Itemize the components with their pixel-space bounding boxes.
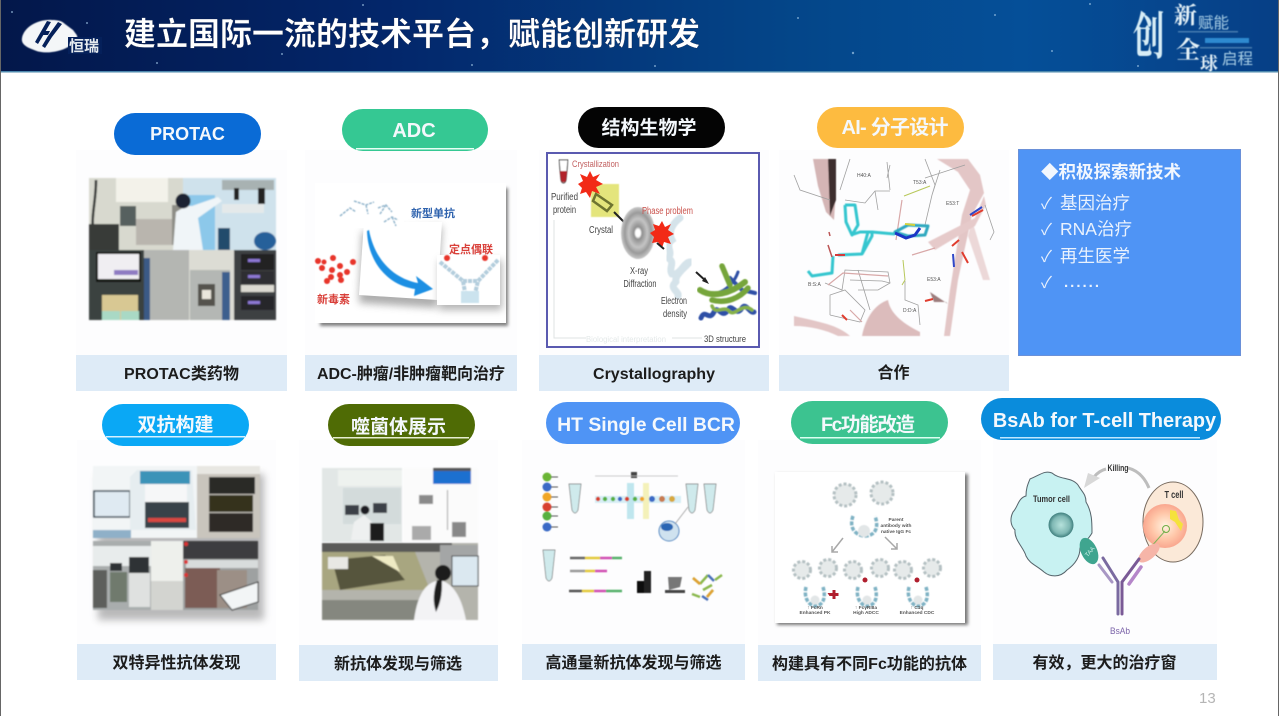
caption: phage display (299, 645, 498, 681)
pill: bispecific construct: 双抗构建 (137, 413, 214, 436)
diagram: BsAb mechanism: Tumor cell (1033, 494, 1070, 505)
diagram: BsAb mechanism: T cell (1164, 490, 1184, 501)
panel: structural biology (539, 150, 769, 391)
diagram: Fc variants: Enhanced CDC (900, 610, 935, 616)
list: 基因治疗 (1060, 193, 1130, 213)
variant arrows (832, 537, 897, 552)
diffraction disc (621, 207, 655, 259)
caption: single cell (522, 644, 745, 680)
test tube (559, 160, 568, 183)
ligand sticks (808, 205, 928, 276)
logo (22, 20, 102, 55)
red starburst: crystallization (578, 171, 603, 198)
page number: 13 (1199, 690, 1216, 707)
caption: Crystallography (539, 355, 769, 391)
yellow crystal square (591, 184, 619, 217)
diagram: crystallography workflow: X-ray (630, 266, 648, 277)
list: ✓ (1041, 275, 1052, 292)
caption: ADC (305, 355, 517, 391)
diagram: molecular docking (794, 159, 994, 336)
panel: HT single cell BCR (522, 440, 745, 680)
caption: BsAb: 有效，更大的治疗窗 (1032, 653, 1177, 672)
diagram: crystallography workflow: protein (553, 205, 576, 216)
pill: ADC: ADC (392, 120, 436, 142)
3D protein structure (700, 266, 755, 318)
diagram: crystallography workflow: 3D structure (704, 334, 746, 345)
diagram: Fc variants: antibody with (881, 523, 912, 529)
photo: PROTAC laboratory (89, 178, 276, 320)
diagram: crystallography workflow (547, 153, 759, 347)
pill: HT Single Cell BCR (546, 402, 740, 444)
photo: bispecific platform (93, 466, 264, 620)
pill: PROTAC (114, 113, 261, 155)
diagram: Fc variants: ↑ FcRn (807, 605, 823, 611)
campaign emblem: 新 (1174, 3, 1197, 28)
pill: structural biology: 结构生物学 (601, 116, 697, 139)
panel: Fc engineering (758, 440, 981, 681)
header banner (1, 0, 1278, 74)
diagram: molecular docking: B:S:A (808, 282, 821, 288)
diagram: molecular docking: E53:A (927, 277, 941, 283)
red starburst: phase problem (650, 221, 674, 248)
diagram: BsAb mechanism: Killing (1108, 463, 1129, 474)
molecule cluster (340, 201, 398, 226)
caption: phage display: 新抗体发现与筛选 (334, 654, 462, 673)
title: 建立国际一流的技术平台，赋能创新研发 (124, 16, 700, 52)
diagram: crystallography workflow: Crystallization (572, 159, 619, 170)
caption: ADC: ADC-肿瘤/非肿瘤靶向治疗 (317, 364, 505, 383)
T cell (1143, 482, 1203, 562)
diagram: Fc variants: High ADCC (853, 610, 879, 616)
caption: Fc (758, 645, 981, 681)
diagram: crystallography workflow: density (663, 309, 687, 320)
campaign emblem: 球 (1200, 54, 1218, 74)
diagram: crystallography workflow: Biological interpretation (586, 335, 666, 344)
panel: ADC (305, 150, 517, 391)
diagram: crystallography workflow: Purified (551, 192, 578, 203)
toxin dots (315, 255, 356, 284)
curved arrow (367, 230, 433, 296)
tumor cell (1011, 472, 1092, 576)
conjugated antibody (440, 255, 498, 303)
pill: Fc engineering: Fc功能改造 (821, 414, 915, 436)
diagram: Fc variants: Parent (889, 517, 904, 523)
label: 新型单抗: 新型单抗 (411, 206, 455, 220)
diagram: molecular docking: E53:T (946, 201, 959, 207)
electron density map (668, 218, 690, 296)
heading: ◆积极探索新技术 (1041, 162, 1181, 182)
pill: Fc engineering (791, 401, 948, 444)
photo: phage lab (322, 468, 478, 620)
campaign emblem (1133, 3, 1253, 74)
list: RNA治疗 (1060, 219, 1132, 239)
pill: structural biology (578, 107, 725, 148)
campaign emblem: 启程 (1222, 50, 1253, 68)
campaign emblem: 赋能 (1198, 14, 1229, 32)
caption: single cell: 高通量新抗体发现与筛选 (545, 653, 722, 672)
diagram: molecular docking: T53:A (913, 180, 927, 186)
caption: 合作: 合作 (877, 363, 910, 382)
tumor nucleus (1048, 512, 1074, 538)
pill: HT Single Cell BCR: HT Single Cell BCR (557, 414, 735, 436)
diagram: Fc variants (775, 472, 968, 625)
bispecific antibody (1099, 558, 1141, 614)
list: ✓ (1041, 222, 1052, 239)
pill: ADC (342, 109, 488, 151)
pill: phage display: 噬菌体展示 (351, 416, 446, 438)
caption: Crystallography: Crystallography (593, 366, 715, 383)
pill: BsAb for T-cell Therapy (981, 398, 1221, 440)
diagram: BsAb mechanism: TAA (1085, 546, 1096, 559)
diagram: Fc variants: native IgG Fc (881, 529, 911, 535)
pill: BsAb for T-cell Therapy: BsAb for T-cell Therapy (993, 410, 1216, 432)
CD3 receptor (1135, 540, 1163, 566)
diagram: Fc variants: ↑ FcγRIIIa (855, 605, 877, 611)
killing arrow (1094, 468, 1149, 488)
diagram: Fc variants: Enhanced PK (800, 610, 831, 616)
caption: bispecific: 双特异性抗体发现 (112, 653, 241, 672)
list: ...... (1064, 274, 1101, 291)
panel: phage display (299, 440, 498, 681)
panel: new technologies (1018, 150, 1240, 356)
diagram: ADC conjugation (315, 183, 508, 326)
lightning (1170, 510, 1183, 531)
diagram: crystallography workflow: Phase problem (642, 206, 693, 217)
list: 再生医学 (1060, 246, 1130, 266)
diagram: molecular docking: H40:A (857, 173, 872, 179)
tumor antigen (1076, 535, 1102, 567)
diagram: crystallography workflow: Crystal (589, 225, 613, 236)
list (1041, 193, 1132, 292)
campaign emblem: 创 (1133, 10, 1164, 66)
pill: phage display (328, 404, 475, 446)
diagram: crystallography workflow: Diffraction (624, 279, 656, 290)
caption: Fc: 构建具有不同Fc功能的抗体 (772, 654, 967, 673)
diagram: BsAb mechanism (1011, 463, 1203, 637)
caption: PROTAC: PROTAC类药物 (124, 365, 239, 383)
diagram: BsAb mechanism: BsAb (1110, 626, 1130, 637)
list: ✓ (1041, 249, 1052, 266)
caption: BsAb (993, 644, 1217, 680)
caption: bispecific (77, 644, 276, 680)
panel: bispecific construct (77, 440, 276, 680)
pill: AI molecule design: AI- 分子设计 (842, 116, 948, 139)
pill: PROTAC: PROTAC (150, 124, 225, 144)
label: 新毒素: 新毒素 (317, 292, 350, 306)
diagram: molecular docking: D:D:A (903, 308, 917, 314)
mutation markers (828, 590, 838, 599)
label: 定点偶联: 定点偶联 (449, 242, 493, 256)
pill: bispecific construct (102, 404, 249, 446)
panel: PROTAC (76, 150, 287, 391)
diagram: Fc variants: ↑ C1q (911, 605, 923, 611)
campaign emblem: 全 (1176, 37, 1200, 64)
caption: 合作 (779, 355, 1009, 391)
panel: AI molecule design (779, 150, 1009, 391)
logo: 恒瑞 (69, 37, 99, 55)
panel: BsAb T-cell therapy (993, 440, 1217, 680)
diagram: crystallography workflow: Electron (661, 296, 687, 307)
caption: PROTAC (76, 355, 287, 391)
diagram: single cell workflow (542, 472, 722, 600)
list: ✓ (1041, 196, 1052, 213)
pill: AI molecule design (817, 107, 964, 148)
